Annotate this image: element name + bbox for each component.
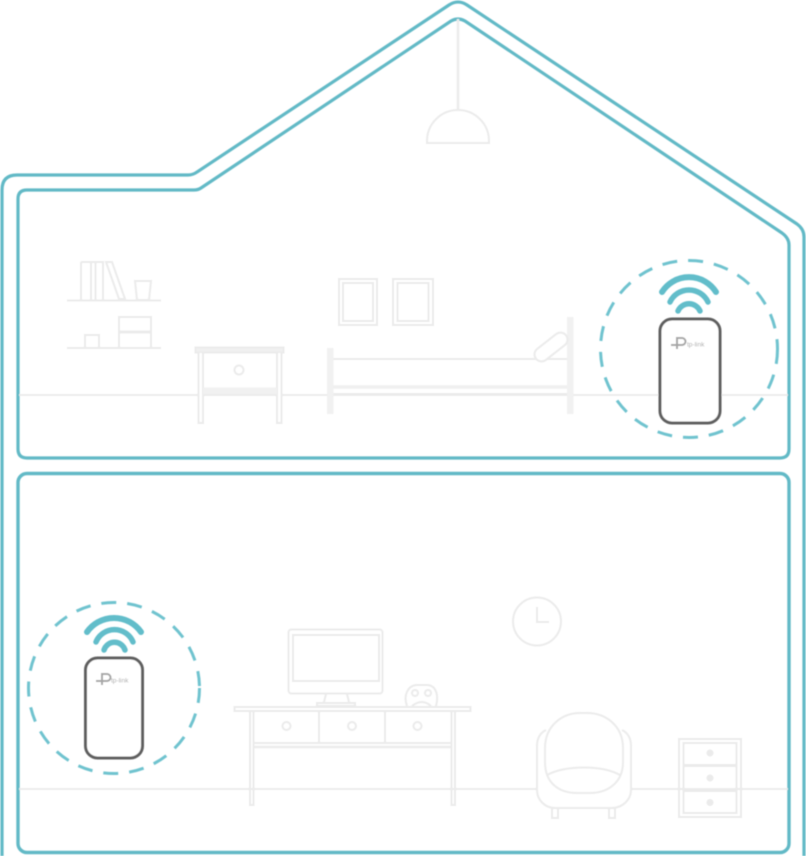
bookshelves (67, 262, 161, 348)
dashed range circle (28, 602, 200, 774)
device logo: tp-link (687, 342, 705, 348)
desk (234, 707, 470, 805)
extender device (86, 658, 142, 758)
chest of drawers (679, 739, 741, 817)
dashed range circle (600, 260, 778, 438)
monitor (288, 630, 382, 706)
wifi signal icon (87, 618, 141, 650)
lower wifi extender group (28, 602, 200, 774)
device logo (671, 338, 705, 349)
upper room floor line (19, 394, 788, 396)
wall pictures (339, 279, 433, 325)
upper room outline (18, 19, 789, 458)
extender device (660, 319, 720, 423)
wifi signal icon (662, 277, 716, 311)
device logo: tp-link (111, 678, 129, 684)
lower room floor line (19, 788, 788, 790)
upper wifi extender group (600, 260, 778, 438)
bed (328, 318, 572, 413)
lower room outline (18, 474, 789, 852)
bedside table (196, 348, 284, 423)
armchair (537, 713, 631, 818)
ceiling lamp (427, 19, 489, 143)
device logo (96, 674, 129, 685)
wall clock (513, 598, 561, 646)
game controller (406, 685, 437, 706)
